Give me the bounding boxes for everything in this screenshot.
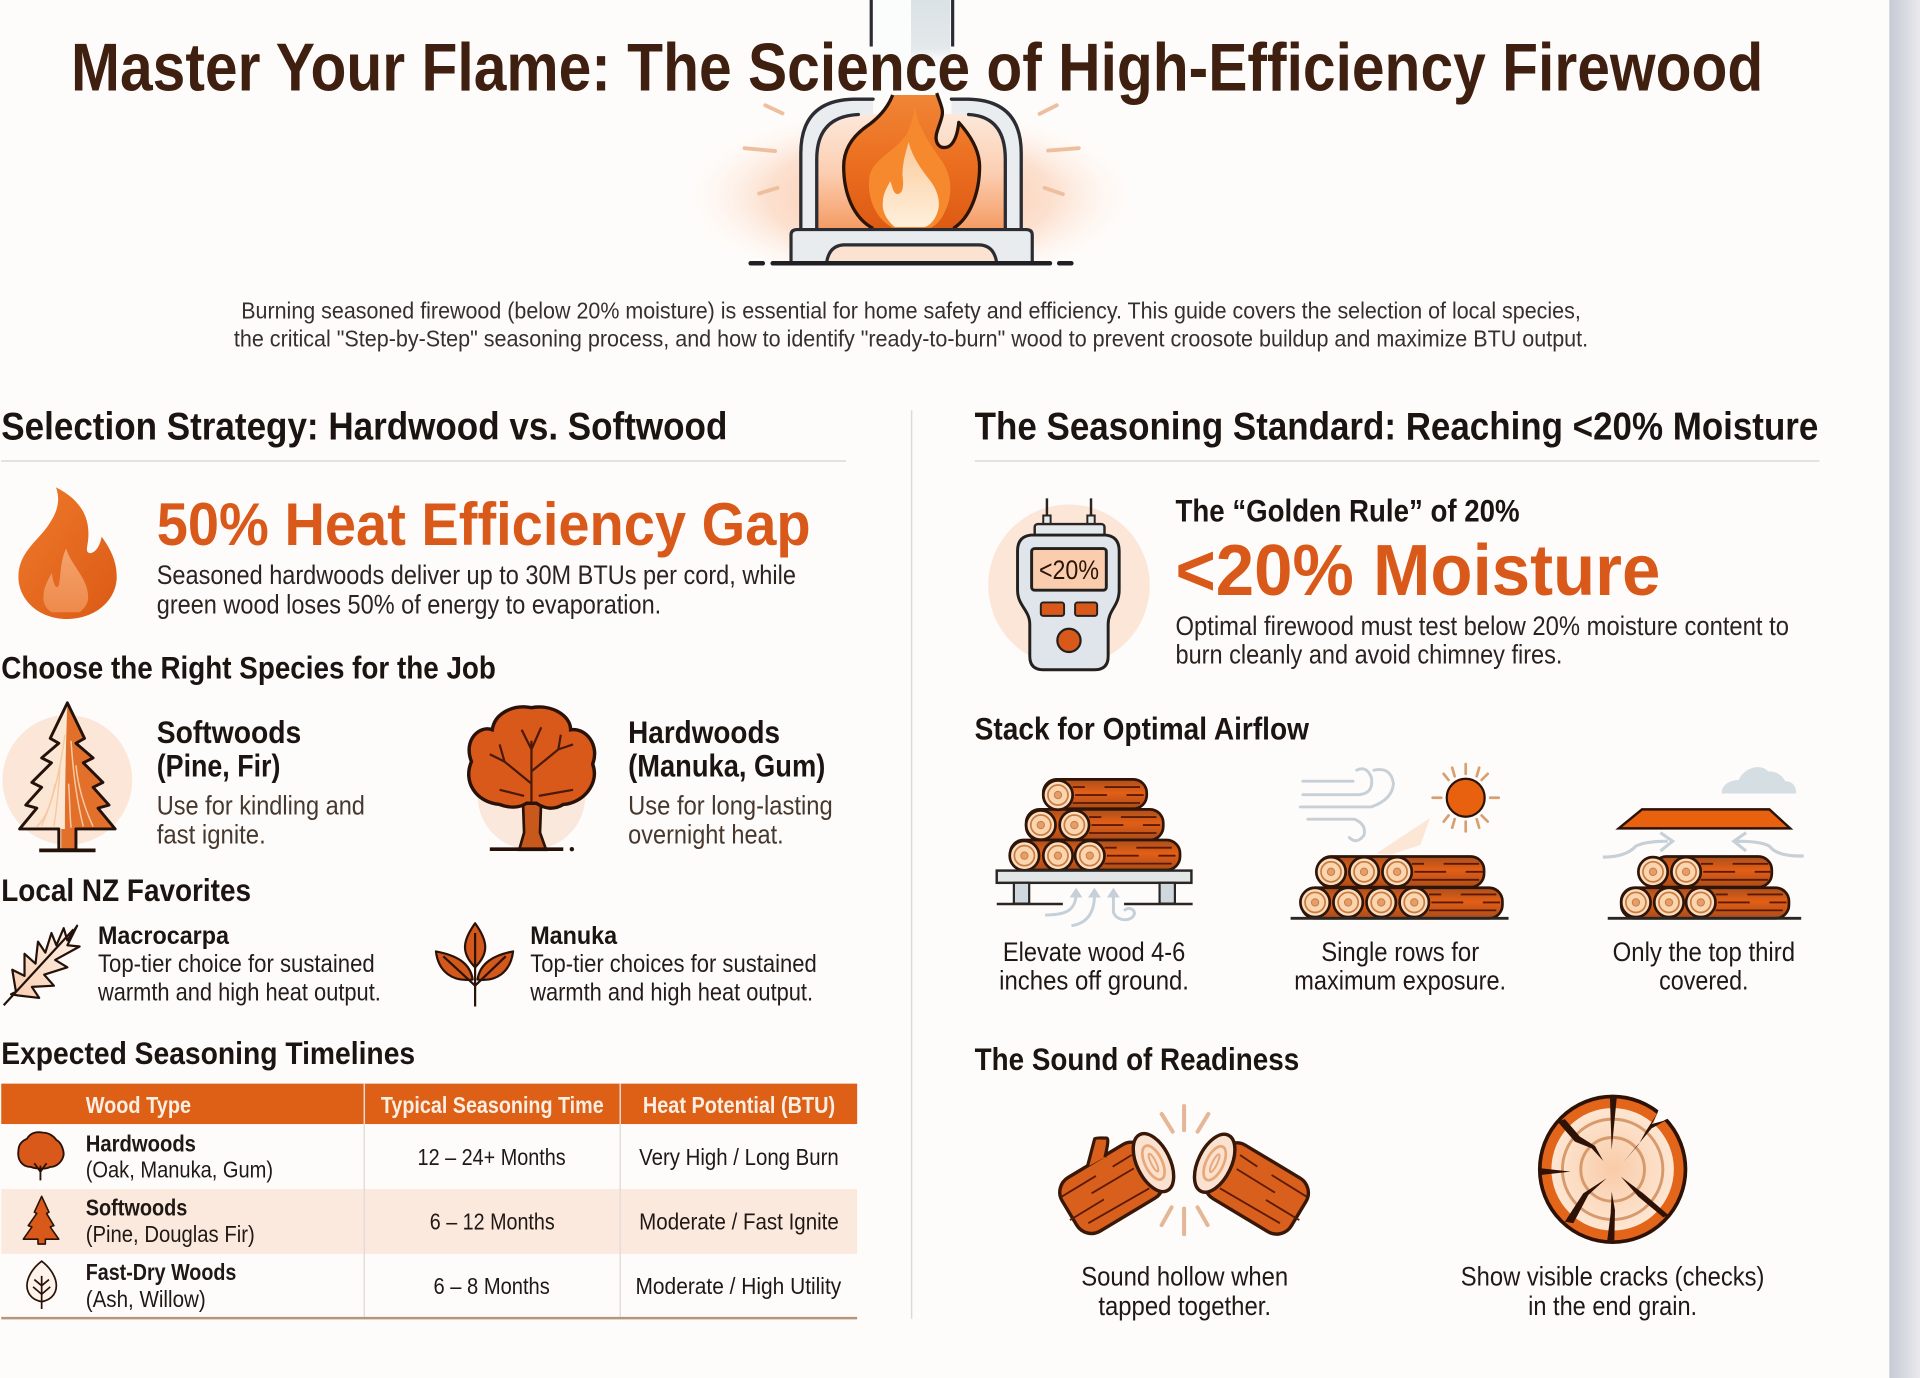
macrocarpa text: Top-tier choice for sustained: [98, 950, 375, 978]
icon: covered log stack: [1603, 767, 1804, 918]
heading: choose species: Choose the Right Species for the Job: [1, 650, 496, 685]
heading: local NZ favorites: Local NZ Favorites: [1, 873, 251, 908]
intro text: the critical "Step-by-Step" seasoning process, and how to identify "ready-to-burn" wood to prevent croosote buildup and maximize BTU output.: [234, 326, 1588, 352]
step: cover top third: [1603, 767, 1804, 995]
softwoods text: [157, 715, 365, 850]
callout: golden rule: burn cleanly and avoid chimney fires.: [1176, 640, 1562, 670]
caption: top third: covered.: [1659, 965, 1749, 995]
heading: expected seasoning timelines: Expected Seasoning Timelines: [1, 1036, 415, 1071]
row: hardwoods: 12 – 24+ Months: [418, 1144, 566, 1170]
hardwoods text: (Manuka, Gum): [628, 748, 825, 783]
callout: golden rule: Optimal firewood must test below 20% moisture content to: [1176, 611, 1789, 641]
icon: elevated log stack: [997, 779, 1193, 926]
flame: [844, 93, 980, 228]
caption: elevate: Elevate wood 4-6: [1003, 937, 1185, 967]
table header: Heat Potential (BTU): [643, 1092, 835, 1118]
right edge strip: [1889, 0, 1920, 1378]
heading: selection strategy: Selection Strategy: Hardwood vs. Softwood: [1, 406, 727, 449]
row: softwoods: Softwoods: [86, 1194, 187, 1220]
callout: golden rule: [1176, 494, 1789, 670]
table header: Typical Seasoning Time: [381, 1092, 604, 1118]
row: softwoods: Moderate / Fast Ignite: [639, 1208, 839, 1234]
caption: elevate: [999, 937, 1189, 995]
fireplace arch: [801, 99, 1021, 230]
caption: visible cracks: Show visible cracks (checks): [1461, 1262, 1764, 1292]
macrocarpa text: warmth and high heat output.: [97, 978, 381, 1006]
softwoods text: fast ignite.: [157, 820, 266, 850]
icon: small leaf: [27, 1261, 56, 1309]
caption: single rows: maximum exposure.: [1294, 965, 1506, 995]
row: hardwoods: (Oak, Manuka, Gum): [86, 1156, 273, 1182]
hero illustration: fireplace with flame: [692, 0, 1128, 263]
flue: [871, 0, 953, 96]
hardwoods text: Use for long-lasting: [628, 790, 833, 820]
icon: wind: [1300, 769, 1393, 841]
row: softwoods: (Pine, Douglas Fir): [86, 1221, 255, 1247]
softwoods text: (Pine, Fir): [157, 748, 280, 783]
icon: roof cover: [1619, 809, 1790, 828]
callout: 50% heat efficiency gap: [157, 491, 811, 619]
heading: stack for optimal airflow: Stack for Optimal Airflow: [975, 712, 1310, 747]
caption: sound hollow: tapped together.: [1098, 1291, 1271, 1321]
manuka text: warmth and high heat output.: [529, 978, 813, 1006]
manuka text: [529, 922, 817, 1006]
icon: small softwood tree: [23, 1196, 59, 1244]
row: fast-dry woods: [27, 1259, 842, 1312]
step: single rows: [1291, 764, 1509, 995]
icon: moisture meter: <20%: [1039, 555, 1099, 585]
icon: cloud: [1722, 767, 1796, 793]
caption: single rows: Single rows for: [1321, 937, 1479, 967]
icon: hardwood tree: [469, 707, 595, 851]
callout: golden rule: <20% Moisture: [1176, 531, 1660, 611]
caption: sound hollow: [1081, 1262, 1288, 1321]
row: hardwoods: Very High / Long Burn: [639, 1144, 839, 1170]
step: elevate wood: [997, 779, 1193, 995]
intro text: Burning seasoned firewood (below 20% moisture) is essential for home safety and efficiency. This guide covers the selection of local species,: [241, 297, 1581, 323]
caption: visible cracks: [1461, 1262, 1764, 1321]
panel: selection strategy: [1, 406, 857, 1318]
table header: [1, 1084, 857, 1124]
icon: flame: [18, 487, 117, 619]
row: softwoods: [23, 1194, 839, 1247]
icon: manuka leaves: [436, 923, 513, 1007]
heat glow: [692, 88, 1128, 263]
row: hardwoods: Hardwoods: [86, 1131, 196, 1157]
manuka text: Top-tier choices for sustained: [530, 950, 817, 978]
icon: wind, sun and log rows: [1291, 764, 1509, 918]
hearth base: [751, 230, 1071, 263]
centre divider: [911, 410, 913, 1319]
row: fast-dry woods: Fast-Dry Woods: [86, 1259, 236, 1285]
hardwoods text: overnight heat.: [628, 820, 784, 850]
row: fast-dry woods: 6 – 8 Months: [433, 1273, 550, 1299]
panel: seasoning standard: [975, 406, 1820, 1321]
callout: 50% heat efficiency gap: Seasoned hardwoods deliver up to 30M BTUs per cord, while: [157, 560, 796, 590]
macrocarpa text: Macrocarpa: [98, 922, 230, 950]
row: hardwoods: [18, 1131, 839, 1182]
icon: moisture meter: [988, 498, 1150, 670]
row: fast-dry woods: Moderate / High Utility: [636, 1273, 842, 1299]
icon: cracked log end grain: [1540, 1096, 1685, 1242]
table header: Wood Type: [86, 1092, 191, 1118]
intro text: [234, 297, 1588, 352]
heading: the sound of readiness: The Sound of Readiness: [975, 1042, 1299, 1077]
hardwoods text: [628, 715, 833, 850]
icon: macrocarpa leaf: [4, 926, 80, 1005]
callout: golden rule: The “Golden Rule” of 20%: [1176, 494, 1520, 529]
softwoods text: Softwoods: [157, 715, 301, 750]
icon: small hardwood tree: [18, 1132, 64, 1180]
row: softwoods: 6 – 12 Months: [430, 1208, 555, 1234]
caption: top third: [1613, 937, 1795, 995]
table: seasoning timelines: [1, 1084, 857, 1318]
icon: softwood tree: [2, 703, 132, 850]
icon: logs tapping: [1053, 1106, 1315, 1240]
macrocarpa text: [97, 922, 381, 1006]
heat rays: [744, 105, 1079, 194]
icon: sun: [1376, 764, 1499, 855]
caption: elevate: inches off ground.: [999, 965, 1189, 995]
caption: visible cracks: in the end grain.: [1528, 1291, 1697, 1321]
caption: single rows: [1294, 937, 1506, 995]
caption: sound hollow: Sound hollow when: [1081, 1262, 1288, 1292]
manuka text: Manuka: [530, 922, 618, 950]
callout: 50% heat efficiency gap: 50% Heat Efficiency Gap: [157, 491, 811, 558]
hardwoods text: Hardwoods: [628, 715, 780, 750]
callout: 50% heat efficiency gap: green wood loses 50% of energy to evaporation.: [157, 589, 661, 619]
row: fast-dry woods: (Ash, Willow): [86, 1286, 206, 1312]
heading: seasoning standard: The Seasoning Standard: Reaching <20% Moisture: [975, 406, 1818, 449]
softwoods text: Use for kindling and: [157, 790, 365, 820]
caption: top third: Only the top third: [1613, 937, 1795, 967]
